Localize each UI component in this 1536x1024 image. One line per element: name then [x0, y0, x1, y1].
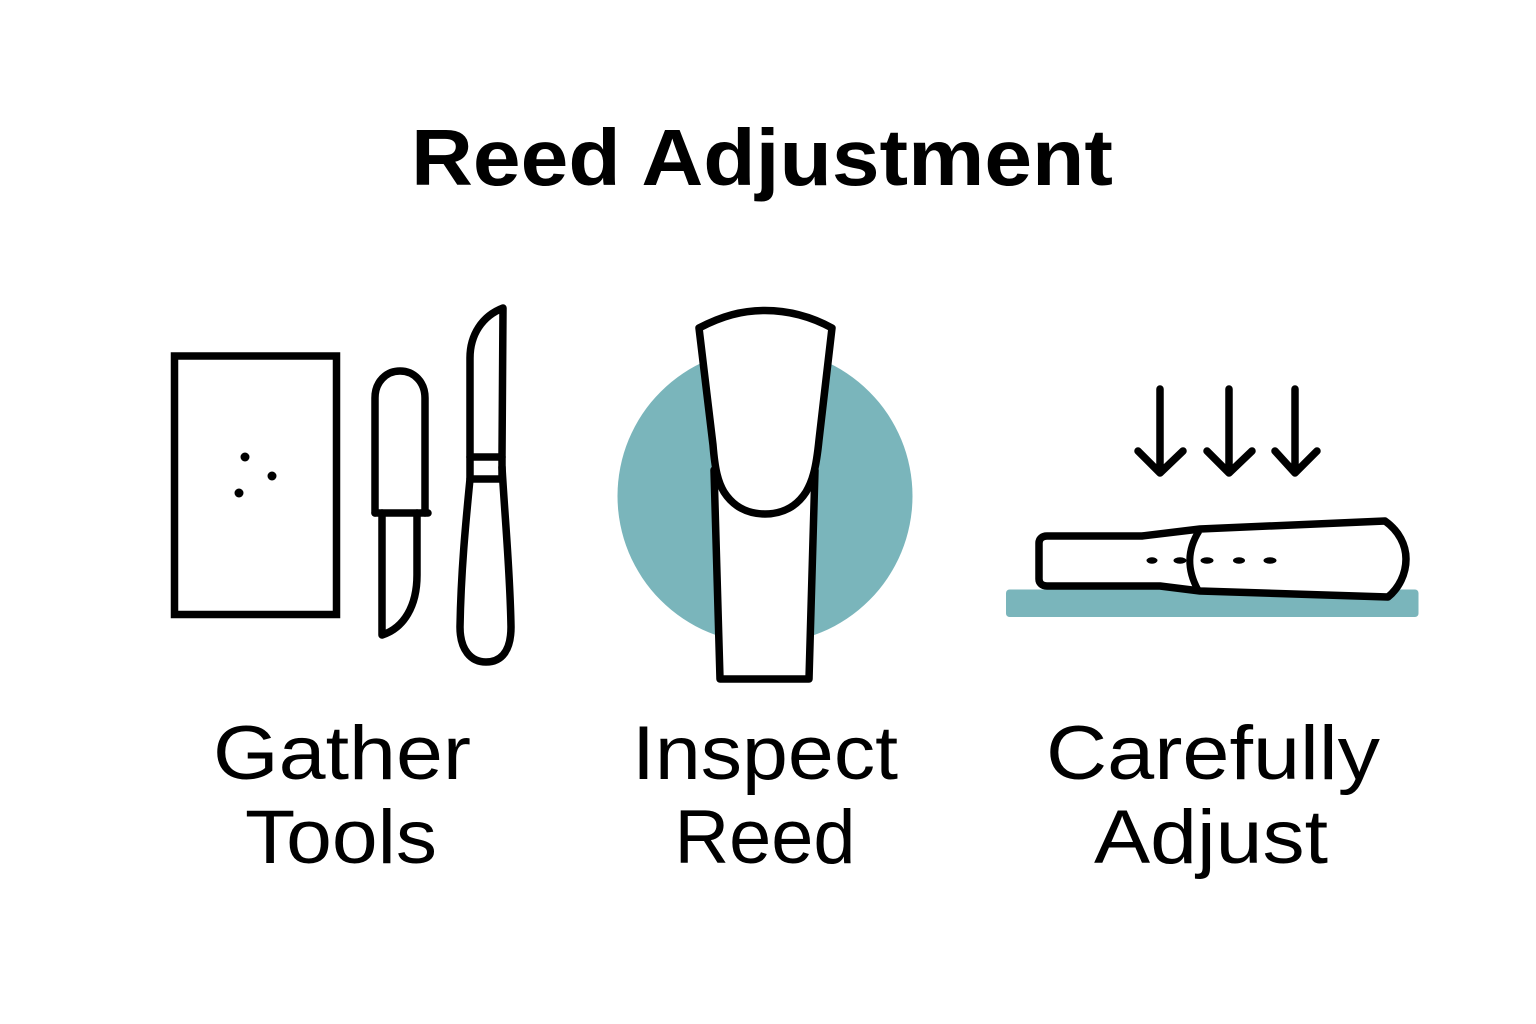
label: carefully adjust: Adjust: [1094, 795, 1328, 880]
icon: teal base plate: [1006, 590, 1418, 617]
icon: reed lying flat: [1039, 521, 1406, 597]
icon: reed: [699, 310, 832, 679]
panel: gather tools: [174, 308, 511, 880]
label: gather tools: [213, 711, 471, 880]
icon: reed knife: [460, 308, 511, 662]
label: inspect reed: Reed: [674, 795, 856, 880]
label: inspect reed: [632, 711, 898, 880]
label: gather tools: Tools: [245, 795, 437, 880]
icon: small knife: [375, 371, 428, 635]
label: carefully adjust: [1046, 711, 1380, 880]
icon: sharpening plaque: [174, 356, 336, 614]
label: carefully adjust: Carefully: [1046, 711, 1380, 796]
title: Reed Adjustment: [411, 113, 1113, 202]
panel: inspect reed: [618, 310, 912, 880]
panel: carefully adjust: [1006, 389, 1418, 880]
icon: teal circle: [618, 348, 912, 644]
label: gather tools: Gather: [213, 711, 471, 796]
icon: down arrows: [1138, 389, 1317, 473]
label: inspect reed: Inspect: [632, 711, 898, 796]
